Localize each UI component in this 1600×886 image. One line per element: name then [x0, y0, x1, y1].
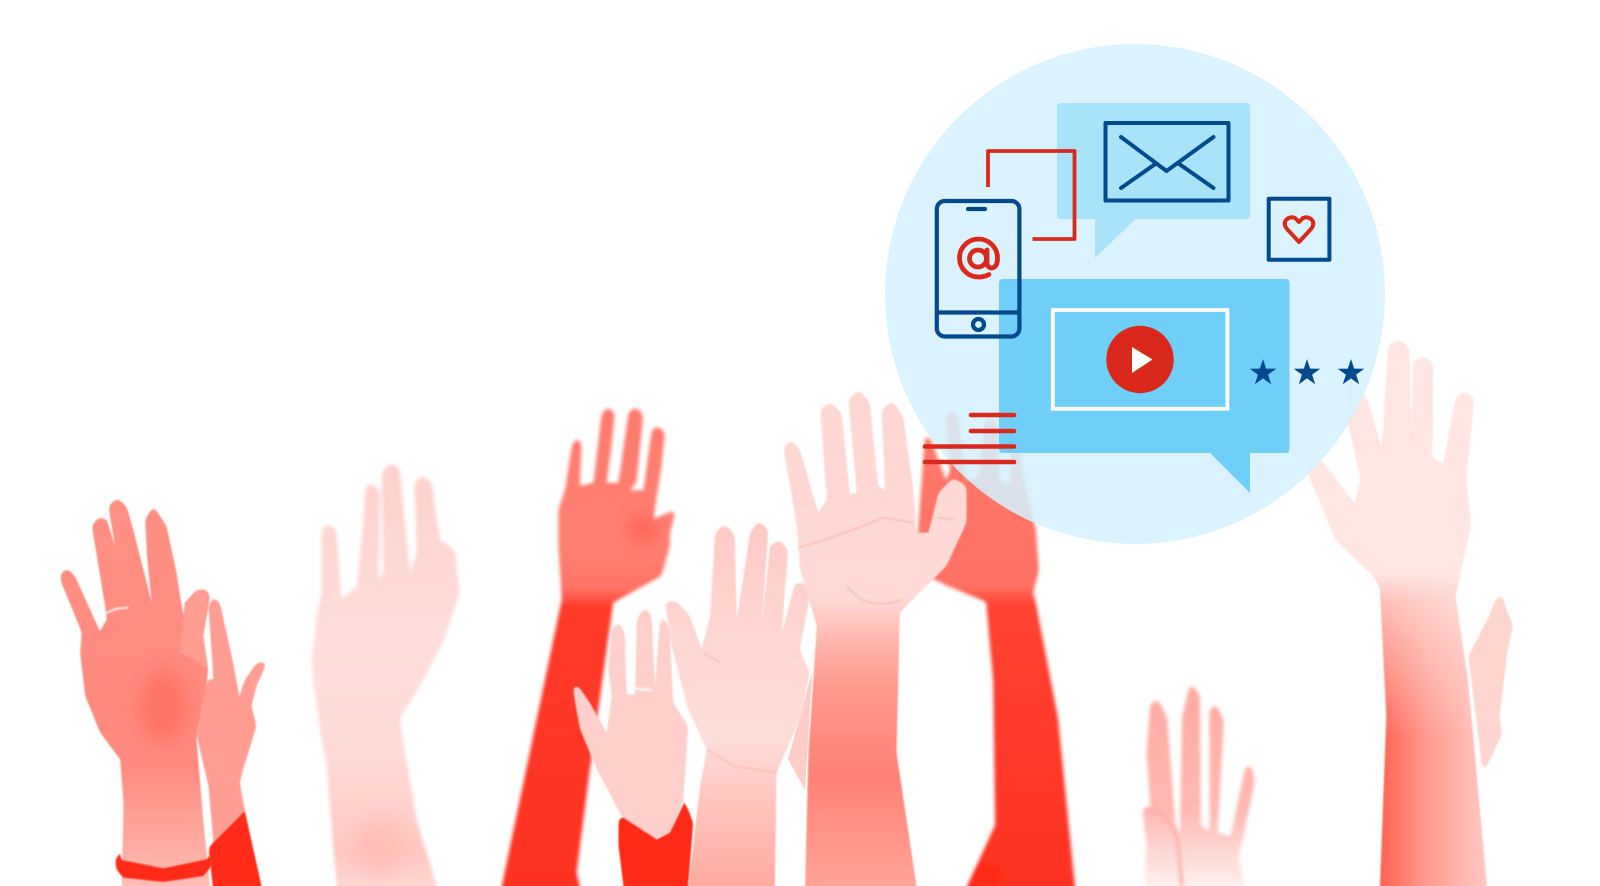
icon: envelope: [1106, 123, 1228, 200]
icon: red text lines: [925, 415, 1014, 462]
hand: deep red blurred hand and forearm: [497, 406, 677, 886]
creases: lightest hand: [703, 653, 777, 773]
icon: at sign: [960, 239, 998, 277]
icon: heart in square: [1269, 199, 1329, 260]
circle background: [885, 44, 1385, 544]
forearm shading: pale hand: [357, 816, 403, 876]
hand: small pale hand with ring and red cuff: [573, 606, 693, 886]
thumb highlight: [180, 590, 209, 669]
upper hand tone: [1302, 339, 1491, 886]
sleeve: far-left rear hand: [208, 811, 265, 886]
connector: red bracket: [988, 151, 1074, 239]
hand: red hand partly behind the circle: [915, 408, 1080, 886]
hand: far-left front hand with ring and bracelet: [60, 498, 212, 886]
hand: bottom blurred pale hand: [1142, 681, 1255, 886]
palm shading: deep red hand: [630, 516, 657, 543]
hand: small pale hand behind right arm: [1468, 595, 1513, 775]
icon: smartphone: [937, 201, 1019, 336]
creases: large hand: [798, 518, 953, 604]
hand: pale open hand at left: [312, 462, 460, 886]
icon: video speech bubble: [999, 279, 1290, 493]
hand: large centre hand in front of circle: [783, 389, 967, 886]
ring: [633, 689, 652, 690]
icon: email speech bubble: [1057, 103, 1250, 258]
hand: far-left rear hand with dark sleeve: [197, 596, 268, 886]
hand: lightest front centre hand: [665, 520, 810, 886]
hand: tall right hand: [1302, 339, 1491, 886]
palm shading: [140, 669, 187, 743]
icon: video frame with play button: [1053, 310, 1227, 409]
hand: sliver of arm behind centre hands: [788, 673, 812, 790]
bracelet: [115, 851, 212, 882]
icon: three stars: [1250, 359, 1364, 384]
ring: [105, 608, 128, 613]
thumb edge: bottom hand: [1144, 807, 1182, 886]
cuff: [618, 801, 693, 886]
cuff: red hand behind circle: [950, 865, 1000, 886]
